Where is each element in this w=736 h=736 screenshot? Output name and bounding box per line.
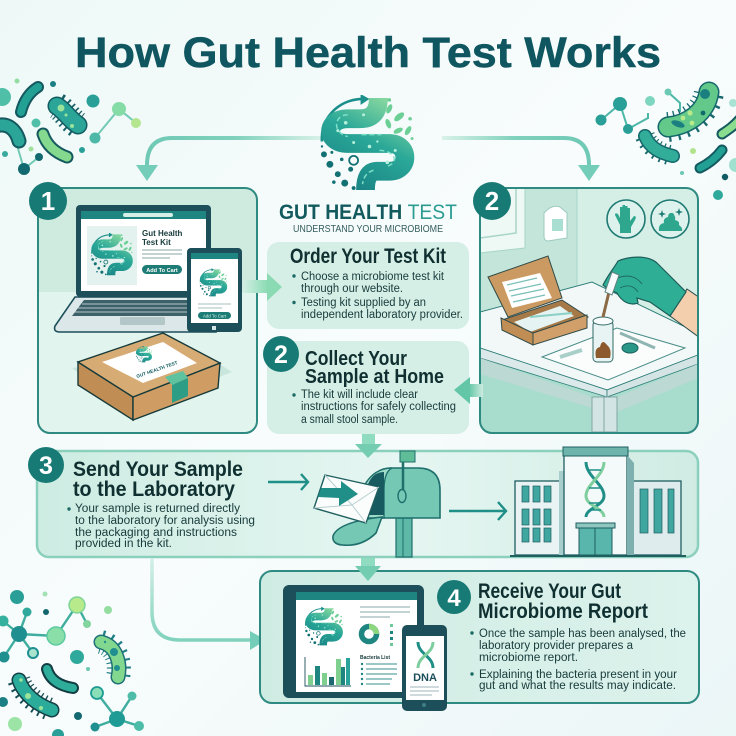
heading: Collect Your	[305, 347, 407, 370]
icon: wall dispenser	[544, 206, 567, 241]
logo: gut health test	[279, 94, 457, 235]
bullet list: laboratory provider prepares a	[479, 640, 634, 652]
number badge 4	[437, 580, 471, 614]
icon: tablet: Add To Cart	[203, 314, 227, 318]
number badge 1	[29, 182, 67, 220]
icon: laptop: Test Kit	[142, 238, 171, 247]
icon: report tablet: Bacteria List	[360, 655, 390, 661]
bullet list: Once the sample has been analysed, the	[479, 628, 686, 640]
arrow: logo to step 2	[442, 138, 600, 181]
icon: sample jar	[593, 292, 613, 362]
icon: open kit box	[488, 256, 588, 345]
icon: gut	[321, 94, 414, 190]
panel: step 2 illustration	[480, 188, 700, 435]
bullet list	[292, 389, 456, 426]
number badge 2 center: 2	[274, 341, 288, 369]
icon: gloved hand	[603, 257, 700, 338]
bullet list	[67, 503, 255, 550]
heading: Send Your Sample	[73, 458, 243, 481]
heading: Receive Your Gut	[478, 580, 621, 603]
number badge 3	[28, 447, 64, 483]
icon: phone with DNA	[402, 625, 447, 711]
bullet list: the packaging and instructions	[75, 527, 237, 539]
bullet list: Testing kit supplied by an	[301, 297, 426, 309]
bullet list: Choose a microbiome test kit	[301, 271, 445, 283]
panel: collect your sample	[267, 341, 469, 434]
bullet list: Explaining the bacteria present in your	[479, 669, 677, 681]
bullet list: Your sample is returned directly	[75, 503, 240, 515]
icon: sample badge	[651, 200, 689, 238]
bullet list: independent laboratory provider.	[301, 309, 463, 321]
icon: tablet	[187, 248, 242, 332]
icon: report tablet	[283, 585, 424, 698]
panel: collect your sample: Sample at Home	[305, 365, 444, 388]
decoration: bacteria top left	[0, 78, 141, 175]
arrow: step 1 to order	[243, 273, 282, 301]
brand name: GUT HEALTH TEST	[279, 201, 457, 224]
number badge 1: 1	[41, 186, 55, 216]
bullet list	[470, 628, 686, 692]
panel: step 1 illustration	[38, 188, 257, 433]
bullet list: a small stool sample.	[301, 414, 398, 426]
bullet list: The kit will include clear	[301, 389, 418, 401]
arrow: to mailbox	[268, 474, 308, 490]
panel: receive your report: Microbiome Report	[478, 600, 648, 623]
panel: send your sample	[37, 447, 698, 557]
icon: test kit box	[72, 333, 232, 420]
bullet list: through our website.	[301, 283, 403, 295]
bullet list	[292, 271, 463, 321]
tagline: UNDERSTAND YOUR MICROBIOME	[293, 224, 443, 235]
panel: order your test kit	[267, 242, 469, 329]
number badge 4: 4	[447, 585, 461, 612]
bullet list: microbiome report.	[479, 652, 578, 664]
decoration: bacteria top right	[596, 88, 736, 200]
icon: test kit box: GUT HEALTH TEST	[136, 360, 178, 379]
arrow: collect to send	[355, 434, 382, 458]
arrow: send to receive	[355, 558, 381, 581]
icon: laptop: Add To Cart	[146, 268, 178, 274]
number badge 2 top right	[473, 182, 511, 220]
panel: receive your report	[260, 571, 699, 711]
number badge 2 center	[263, 336, 299, 372]
arrow: logo to step 1	[136, 138, 322, 181]
icon: phone with DNA: DNA	[413, 672, 437, 684]
panel: send your sample: to the Laboratory	[73, 478, 235, 501]
decoration: bacteria bottom left	[0, 590, 144, 736]
table	[480, 282, 698, 432]
arrow: send to report (side)	[152, 558, 266, 650]
bullet list: gut and what the results may indicate.	[479, 680, 676, 692]
icon: laptop	[55, 205, 216, 332]
number badge 3: 3	[39, 452, 53, 480]
icon: laptop: Gut Health	[142, 229, 183, 238]
heading: Order Your Test Kit	[290, 245, 446, 268]
icon: laboratory building	[510, 447, 686, 556]
bullet list: provided in the kit.	[75, 538, 172, 550]
arrow: step 2 to collect	[454, 377, 483, 404]
icon: glove badge	[607, 200, 645, 238]
arrow: to laboratory	[449, 502, 506, 520]
icon: mailbox	[314, 451, 440, 557]
bullet list: instructions for safely collecting	[301, 401, 456, 413]
title: How Gut Health Test Works	[75, 29, 661, 77]
bullet list: to the laboratory for analysis using	[75, 515, 255, 527]
number badge 2 top right: 2	[485, 186, 499, 216]
